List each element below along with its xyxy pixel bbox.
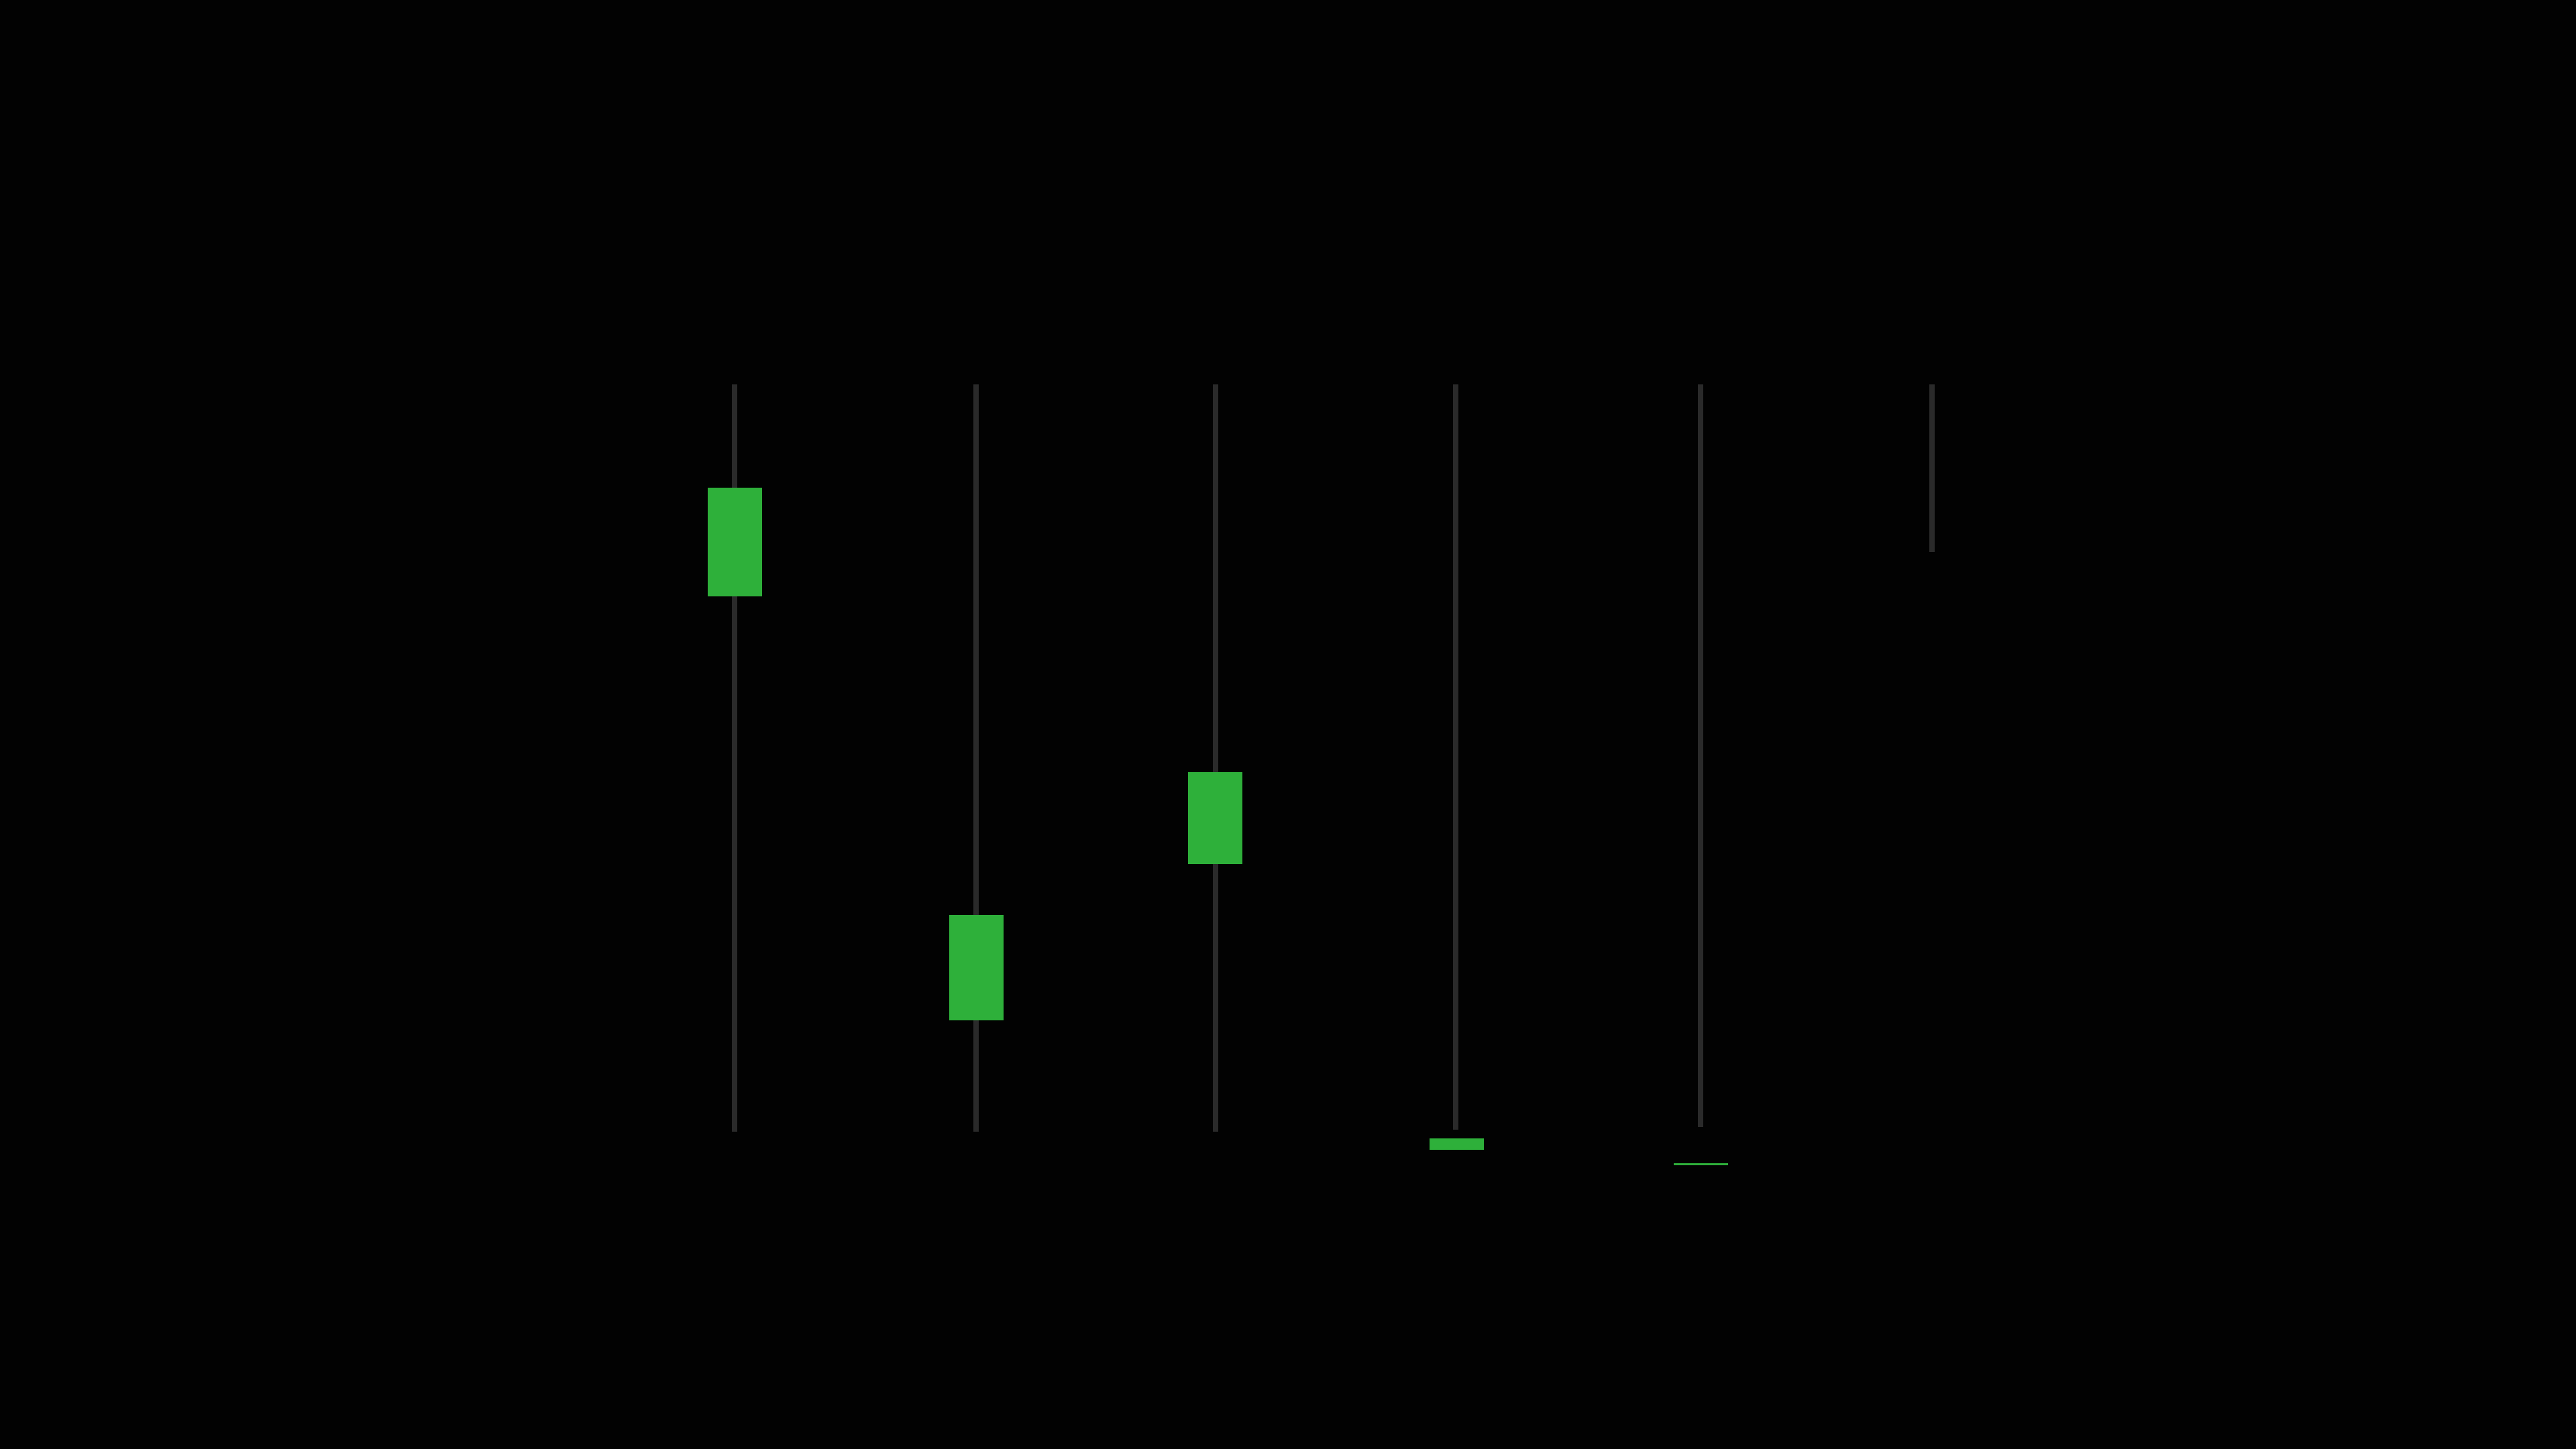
- candle 5: [1674, 384, 1728, 1165]
- candle 4: [1430, 384, 1484, 1150]
- candle 3: [1188, 384, 1242, 1132]
- candle 2: [949, 384, 1004, 1132]
- candle 1: [708, 384, 762, 1132]
- candle 6 wick: [1929, 384, 1935, 552]
- candlestick chart: [708, 384, 1935, 1165]
